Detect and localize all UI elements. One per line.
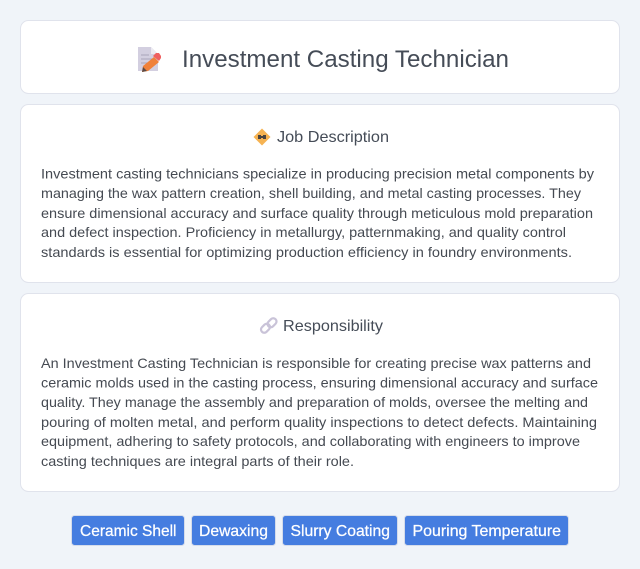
icon: chain link (260, 317, 278, 334)
tags (72, 516, 568, 546)
text block: job description: standards is essential for optimizing production efficiency in foundry environments. (41, 244, 572, 260)
text block: job description: managing the wax pattern creation, shell building, and metal casting processes. They (41, 185, 581, 201)
text block: job description (41, 166, 594, 260)
tag: slurry coating: Slurry Coating (290, 523, 390, 540)
tag: slurry coating (282, 516, 398, 546)
text block: responsibility: An Investment Casting Technician is responsible for creating precise wax patterns and (41, 355, 591, 371)
panel: title (20, 20, 620, 94)
text block: responsibility: pouring of molten metal, and perform quality inspections to detect defects. Maintaining (41, 414, 597, 430)
heading: responsibility: Responsibility (283, 318, 383, 335)
text block: responsibility (41, 355, 598, 469)
tag: dewaxing (192, 516, 276, 546)
tag: ceramic shell: Ceramic Shell (80, 523, 176, 540)
text block: responsibility: ceramic molds used in the casting process, ensuring dimensional accuracy and surface (41, 374, 598, 390)
text block: responsibility: equipment, adhering to safety protocols, and collaborating with engineers to improve (41, 433, 580, 449)
tag: ceramic shell (72, 516, 184, 546)
icon: document with pencil (138, 47, 161, 72)
title text: Investment Casting Technician (182, 46, 509, 73)
icon: job description diamond (254, 128, 270, 146)
text block: job description: Investment casting technicians specialize in producing precision metal components by (41, 166, 594, 182)
heading: job description: Job Description (277, 129, 389, 146)
panel: responsibility (20, 294, 620, 492)
tag: dewaxing: Dewaxing (199, 523, 268, 540)
text block: responsibility: casting techniques are integral parts of their role. (41, 453, 354, 469)
panel: job description (20, 104, 620, 282)
tag: pouring temperature (404, 516, 568, 546)
text block: job description: and defect inspection. Proficiency in metallurgy, patternmaking, and quality control (41, 224, 566, 240)
text block: responsibility: quality. They manage the assembly and preparation of molds, oversee the melting and (41, 394, 588, 410)
text block: job description: ensure dimensional accuracy and surface quality through meticulous mold preparation (41, 205, 593, 221)
tag: pouring temperature: Pouring Temperature (412, 523, 561, 540)
